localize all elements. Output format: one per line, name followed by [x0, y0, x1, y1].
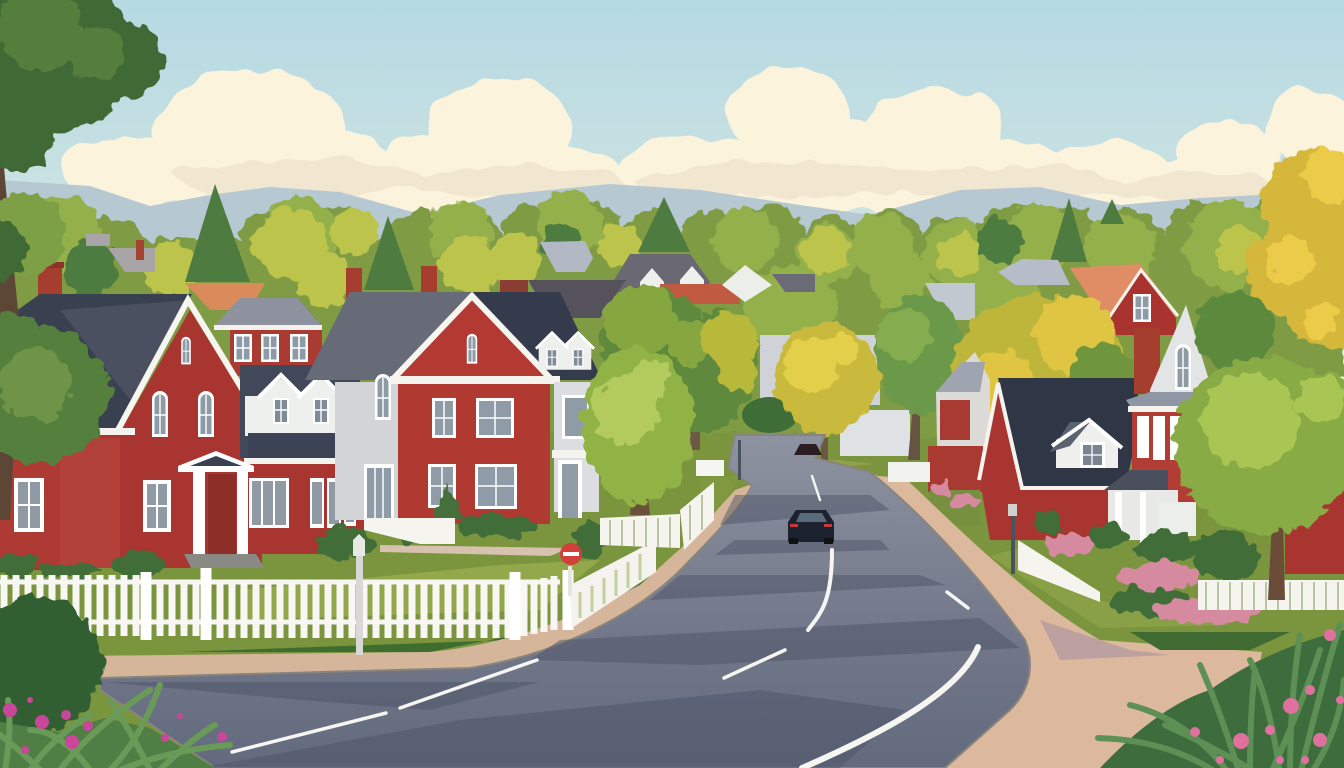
right blue-roof house: [928, 305, 1344, 574]
far right red wall: [1285, 490, 1344, 574]
foreground bush left: [0, 597, 230, 768]
distant houses: [86, 234, 1178, 456]
red facade: [398, 384, 550, 524]
windows: [181, 337, 191, 364]
road markings: [232, 476, 978, 768]
stop sign: [560, 543, 582, 596]
tree: yellow-green right: [949, 295, 1132, 451]
foreground plants right: [1098, 625, 1344, 768]
big tree top left: [0, 0, 163, 520]
car: [788, 510, 834, 544]
red gable: [398, 300, 548, 376]
far red house right: [1070, 264, 1178, 335]
distant fences by road: [696, 460, 930, 482]
dormer: [1050, 420, 1122, 468]
grey roof: [305, 292, 550, 380]
ground base: [0, 400, 1344, 768]
sky: [0, 0, 1344, 400]
tall white/red house: [1134, 328, 1160, 394]
lawns: [0, 460, 1230, 655]
white side wing: [335, 382, 400, 520]
road shadows: [104, 495, 1020, 768]
main white picket fence: [0, 482, 1344, 640]
distant red car: [794, 444, 822, 455]
big tree right: [1173, 147, 1344, 600]
left brick house: [0, 262, 373, 570]
main facade: [0, 310, 262, 570]
back roof: [528, 280, 626, 318]
dark roof: [12, 294, 192, 428]
red facade: [980, 385, 1106, 540]
tree: green behind road: [876, 295, 964, 460]
chimneys: [346, 268, 362, 308]
centre brick house: [305, 266, 626, 524]
clouds: [30, 66, 1344, 214]
porch: [178, 451, 266, 570]
right wing: [240, 365, 372, 458]
orange roof behind: [185, 283, 265, 310]
back house: [214, 298, 322, 376]
tree: central dark green: [599, 284, 758, 450]
background tree line: [0, 191, 1344, 435]
mid-ground trees behind street: [774, 295, 1132, 482]
conifers: [185, 184, 1124, 290]
porch: [1104, 470, 1168, 492]
street lamps: [353, 440, 1017, 655]
distant mountains: [0, 180, 1344, 260]
tree: yellow street tree: [774, 322, 878, 462]
sidewalks and kerbs: [78, 472, 1290, 768]
chimney: [38, 264, 62, 314]
road: [100, 435, 1030, 768]
right dormers: [562, 333, 594, 370]
tree: small green left of road: [582, 347, 694, 515]
side grey house: [936, 352, 990, 490]
centre windows: [432, 398, 456, 438]
hedges and shrubs: [0, 482, 1260, 623]
trees in front of centre house: [582, 284, 758, 515]
